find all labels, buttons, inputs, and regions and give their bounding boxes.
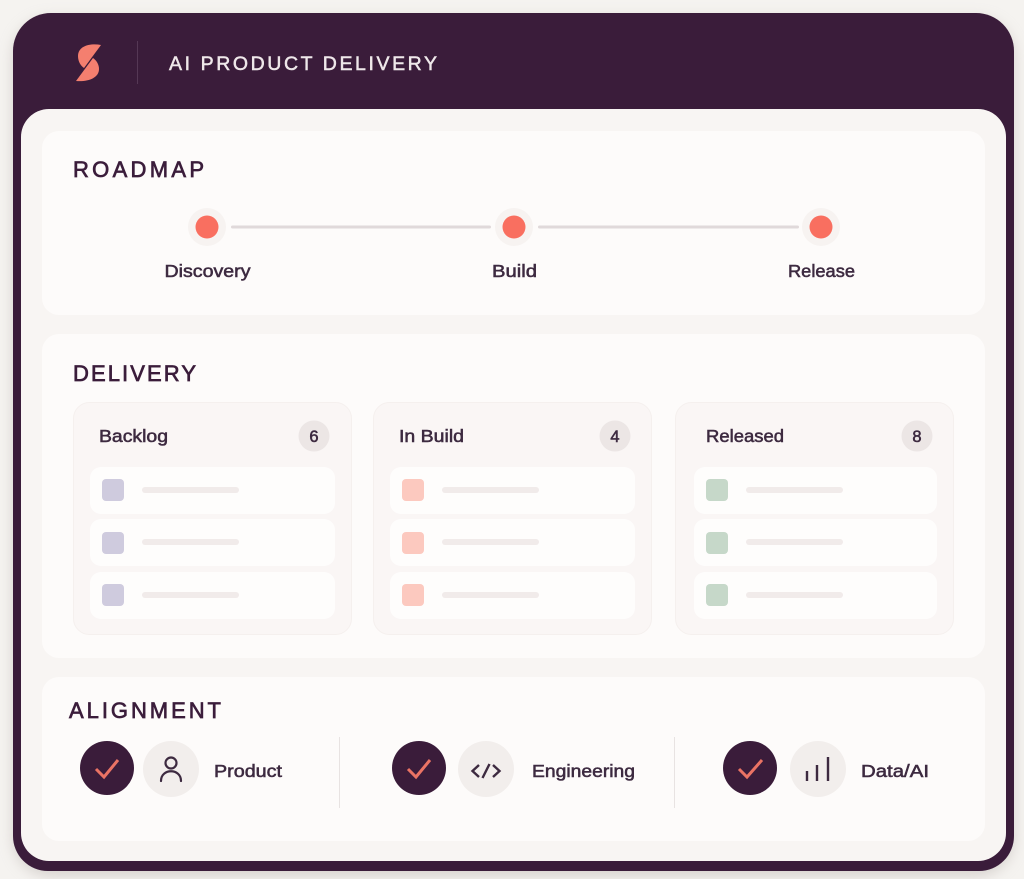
team: product: Product — [214, 761, 282, 781]
column: backlog: 6 — [309, 428, 319, 446]
title: AI PRODUCT DELIVERY — [169, 53, 437, 75]
header bar — [76, 41, 437, 84]
panel: roadmap — [42, 131, 985, 315]
column: released — [676, 402, 954, 634]
column: in build: 4 — [610, 428, 620, 446]
column: backlog — [74, 402, 352, 634]
team: product — [80, 741, 282, 797]
panel: alignment — [42, 677, 985, 841]
column: released: 8 — [912, 428, 922, 446]
heading: alignment: ALIGNMENT — [69, 698, 221, 723]
milestone: discovery: Discovery — [164, 261, 251, 281]
milestone: release — [788, 208, 855, 281]
icon: logo — [76, 44, 101, 81]
roadmap timeline — [164, 208, 855, 281]
column: in build — [374, 402, 652, 634]
team: data/ai — [723, 741, 929, 797]
heading: delivery: DELIVERY — [73, 361, 196, 386]
milestone: build — [492, 208, 537, 281]
team: data/ai: Data/AI — [861, 761, 929, 781]
column: backlog: Backlog — [99, 426, 168, 446]
team: engineering — [392, 741, 635, 797]
column: released: Released — [706, 426, 784, 446]
panel: delivery — [42, 334, 985, 658]
milestone: discovery — [164, 208, 251, 281]
column: in build: In Build — [399, 426, 464, 446]
milestone: build: Build — [492, 261, 537, 281]
heading: roadmap: ROADMAP — [73, 157, 204, 182]
team: engineering: Engineering — [532, 761, 635, 781]
milestone: release: Release — [788, 261, 855, 281]
